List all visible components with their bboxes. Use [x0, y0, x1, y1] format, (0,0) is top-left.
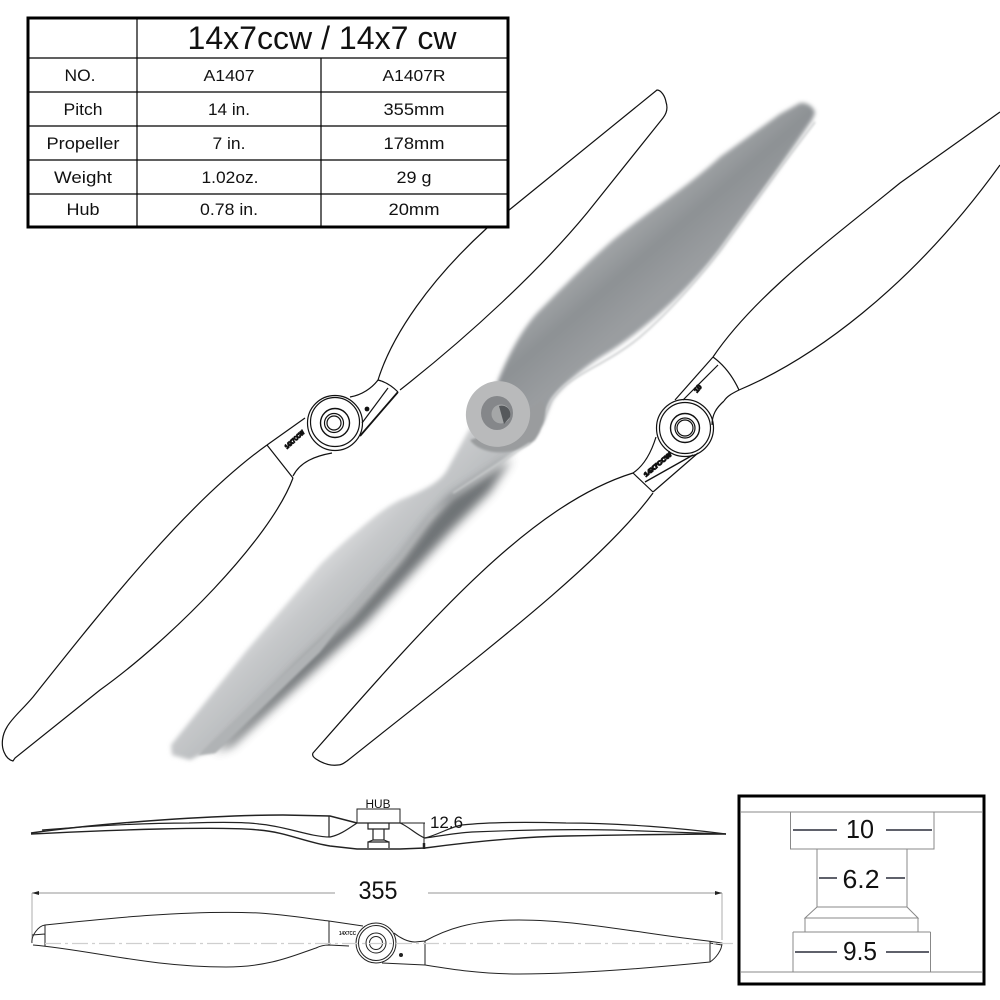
light seam on blade edge: [544, 122, 815, 420]
side view profile drawing: [31, 809, 726, 849]
center grey propeller photo: [171, 103, 815, 760]
right propeller upper blade: [713, 112, 1000, 357]
dimension 6.2: 6.2: [842, 864, 880, 894]
left propeller hub: 14X7CCW: [284, 430, 306, 450]
row: pitch: Pitch: [64, 100, 102, 119]
right propeller hub: [633, 357, 739, 492]
dimension 9.5: 9.5: [843, 936, 877, 966]
upper grey blade: [470, 103, 815, 425]
front view blade outline left: [32, 912, 363, 943]
12.6 label: 12.6: [430, 813, 463, 832]
front view propeller drawing: [32, 912, 722, 974]
side view hub spindle: [368, 823, 389, 848]
specification table: [28, 18, 508, 227]
left propeller upper blade: [378, 90, 667, 390]
hub cross-section outline: [741, 812, 982, 972]
row: pitch: 14 in.: [208, 100, 250, 119]
left propeller hub: [267, 380, 398, 478]
grey hub collar: [470, 400, 545, 452]
row: NO.: A1407R: [382, 68, 446, 85]
HUB label: HUB: [366, 799, 391, 811]
row: hub: [66, 200, 440, 219]
table title: 14x7ccw / 14x7 cw: [188, 20, 457, 56]
row: NO.: [64, 66, 446, 85]
row: hub: 20mm: [388, 200, 440, 219]
shadow under grey blade: [215, 458, 512, 752]
row: weight: 1.02oz.: [202, 168, 258, 187]
row: hub: 0.78 in.: [200, 200, 258, 219]
row: propeller: Propeller: [46, 134, 120, 153]
left propeller lower blade: [2, 445, 293, 761]
dimension 10: [793, 814, 932, 844]
row: propeller: 7 in.: [212, 134, 246, 153]
row: weight: 29 g: [396, 168, 432, 187]
HUB bracket: [357, 809, 400, 823]
dimension 10: 10: [846, 814, 874, 844]
light seam below hub: [453, 443, 530, 493]
inset hub dimension box: [739, 796, 984, 984]
row: propeller: 178mm: [384, 134, 444, 153]
row: hub: Hub: [66, 200, 100, 219]
row: NO.: A1407: [204, 68, 255, 85]
center line: [45, 942, 733, 944]
front view hub: [356, 923, 396, 963]
right propeller lower blade: [313, 473, 653, 765]
dimension 6.2: [819, 864, 905, 894]
front view blade outline right: [382, 920, 722, 974]
row: propeller: [46, 134, 444, 153]
row: pitch: [64, 100, 444, 119]
right propeller line drawing: [313, 112, 1000, 765]
12.6 dimension line: [400, 823, 425, 848]
grey hub face: [457, 372, 539, 456]
row: pitch: 355mm: [384, 100, 444, 119]
row: weight: Weight: [54, 168, 112, 187]
side view blade outlines: [31, 815, 357, 833]
right propeller hub: 10: [693, 384, 704, 394]
lower grey blade: [171, 428, 540, 760]
blade fold tone: [198, 555, 395, 755]
overall width dimension: [32, 877, 722, 940]
dimension 9.5: [795, 936, 929, 966]
row: weight: [54, 168, 432, 187]
left propeller line drawing: [2, 90, 667, 761]
right propeller hub: 14X7CCW: [643, 452, 674, 479]
row: NO.: NO.: [64, 66, 96, 85]
front view propeller drawing: 14X7CC: [339, 931, 356, 937]
355 label: 355: [358, 877, 398, 905]
